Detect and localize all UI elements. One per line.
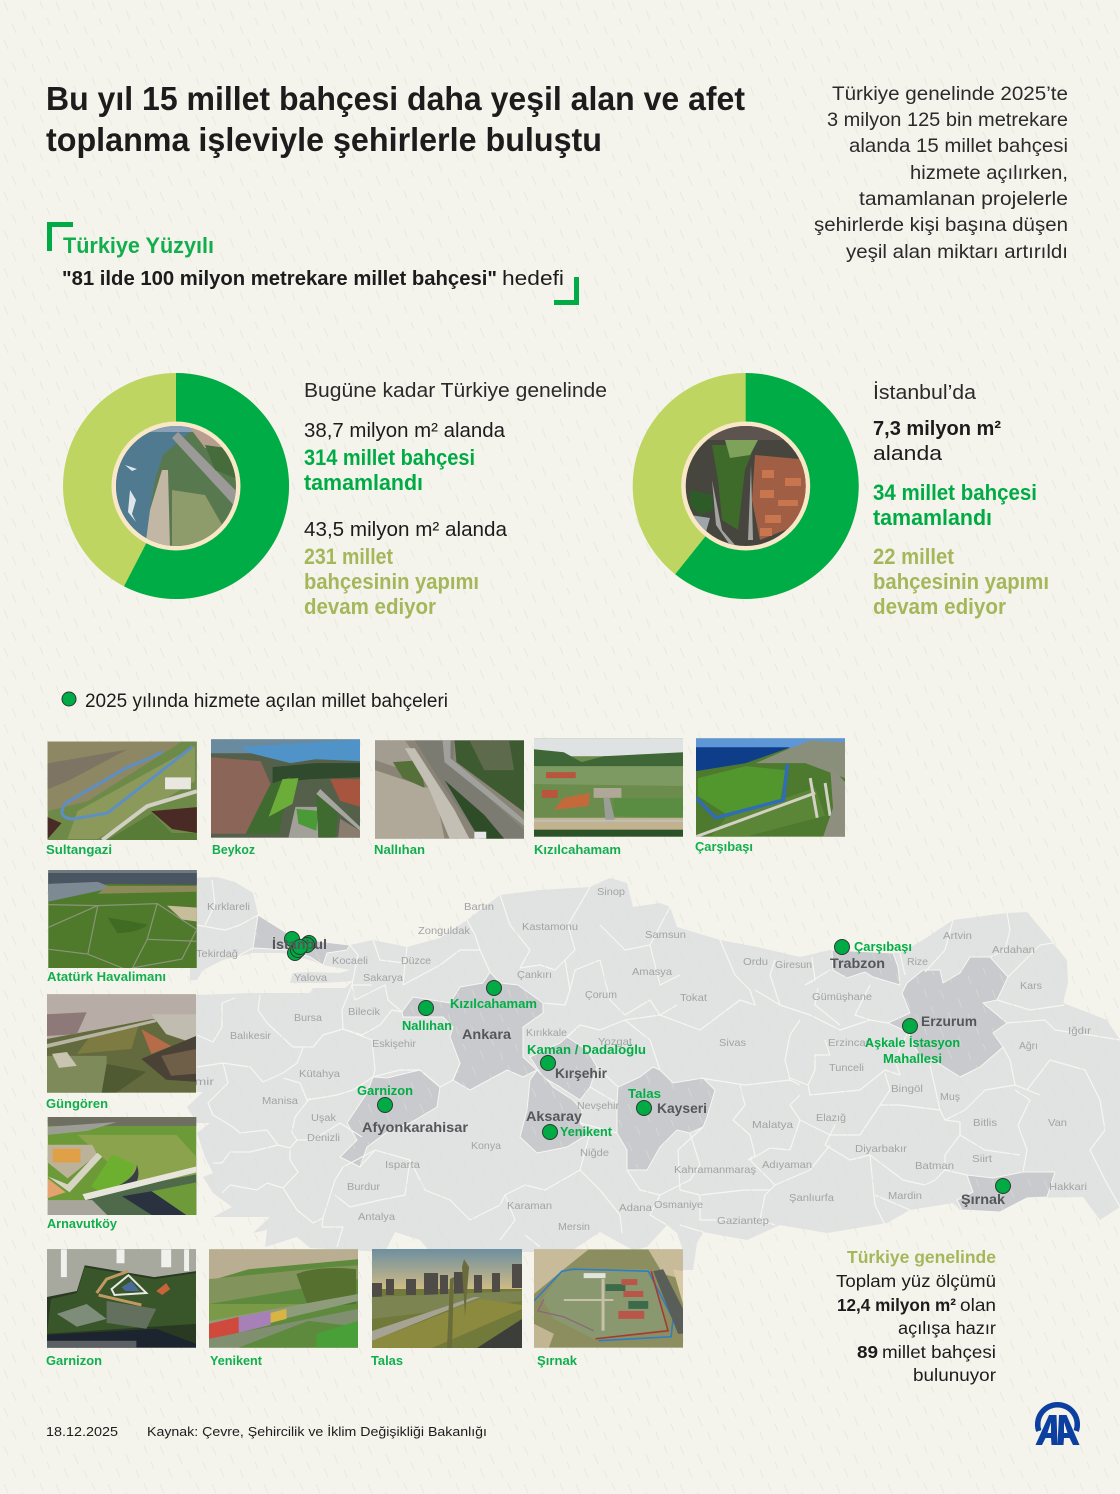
text: İstanbul stats: bahçesinin yapımı — [873, 569, 1049, 594]
photo captions: Atatürk Havalimanı — [47, 970, 166, 984]
text: Türkiye ready to open — [836, 1247, 996, 1385]
highlighted provinces — [253, 915, 1055, 1212]
map labels: provinces: Artvin — [943, 930, 972, 942]
map labels: provinces: Muş — [940, 1091, 960, 1103]
map labels: park locations: Garnizon — [357, 1084, 413, 1098]
icon: AA logo — [1036, 1405, 1080, 1445]
map labels: provinces: Denizli — [307, 1132, 340, 1144]
map labels: provinces: Adana — [619, 1202, 652, 1214]
map labels: provinces: Rize — [907, 956, 928, 968]
text: Türkiye ready to open: 12,4 milyon m² — [837, 1295, 956, 1315]
footer: 18.12.2025 — [46, 1424, 118, 1439]
map labels: provinces: Kahramanmaraş — [674, 1164, 756, 1176]
map labels: provinces: Bursa — [294, 1012, 322, 1024]
photo: Kızılcahamam — [534, 738, 683, 837]
map labels: provinces: Diyarbakır — [855, 1143, 908, 1155]
map labels: highlighted provinces: Kırşehir — [555, 1065, 608, 1081]
Sea of Marmara — [150, 953, 353, 995]
map labels: provinces: Tekirdağ — [196, 948, 238, 960]
callout: Türkiye Yüzyılı goal — [47, 222, 579, 305]
map labels: provinces: Kırıkkale — [526, 1027, 567, 1039]
map labels: highlighted provinces: Erzurum — [921, 1013, 977, 1029]
map labels: provinces: İzmir — [184, 1075, 215, 1088]
text: Türkiye stats: 314 millet bahçesi — [304, 445, 475, 470]
map labels: highlighted provinces: Aksaray — [526, 1108, 582, 1124]
map labels: provinces: Kars — [1020, 980, 1042, 992]
map labels: provinces: Kocaeli — [332, 955, 368, 967]
text: İstanbul stats: tamamlandı — [873, 505, 992, 530]
map labels: provinces: Adıyaman — [762, 1159, 812, 1171]
map labels: provinces: Kırklareli — [207, 901, 250, 913]
map labels: provinces: Uşak — [311, 1112, 337, 1124]
map labels: park locations: Talas — [628, 1087, 661, 1101]
photo captions: Nallıhan — [374, 843, 425, 857]
map labels: park locations: Kaman / Dadaloğlu — [527, 1043, 646, 1057]
photo: Arnavutköy — [48, 1117, 196, 1215]
map labels: provinces: Samsun — [645, 929, 686, 941]
intro text — [814, 83, 1068, 263]
text: Türkiye ready to open: olan — [960, 1295, 996, 1315]
photo captions: Arnavutköy — [47, 1217, 117, 1231]
map labels: provinces: Bitlis — [973, 1117, 997, 1129]
photo: Çarşıbaşı — [696, 738, 845, 837]
text: Türkiye stats — [304, 380, 607, 619]
photo captions: Yenikent — [210, 1354, 263, 1368]
map: Turkey provinces — [150, 877, 1120, 1270]
text: Türkiye stats: devam ediyor — [304, 594, 436, 619]
photo captions: Güngören — [46, 1097, 108, 1111]
map labels: provinces — [184, 886, 1092, 1233]
map labels: highlighted provinces: Şırnak — [961, 1191, 1005, 1207]
map labels: provinces: Antalya — [358, 1211, 395, 1223]
map labels: provinces: Çankırı — [517, 969, 552, 981]
map base — [187, 877, 1120, 1270]
title: toplanma işleviyle şehirlerle buluştu — [46, 121, 602, 158]
map labels: provinces: Manisa — [262, 1095, 298, 1107]
photo captions: Sultangazi — [46, 843, 112, 857]
map labels: provinces: Düzce — [401, 955, 431, 967]
text: Türkiye ready to open: 89 — [857, 1342, 878, 1362]
map labels: highlighted provinces — [272, 936, 1005, 1207]
text: İstanbul stats — [873, 381, 1049, 619]
map labels: provinces: Kastamonu — [522, 921, 578, 933]
map labels: provinces: Çorum — [585, 989, 617, 1001]
map labels: provinces: Bartın — [464, 901, 494, 913]
map labels: park locations: Kızılcahamam — [450, 997, 537, 1011]
donut photo: coast — [116, 426, 236, 546]
map labels: highlighted provinces: Kayseri — [657, 1100, 707, 1116]
text: Türkiye stats: 43,5 milyon m² alanda — [304, 519, 508, 541]
map labels: provinces: Bilecik — [348, 1006, 381, 1018]
map labels: park locations: Aşkale İstasyon — [865, 1035, 960, 1050]
text: İstanbul stats: alanda — [873, 442, 943, 465]
donut chart: İstanbul — [633, 373, 859, 599]
map labels: provinces: Nevşehir — [577, 1100, 620, 1112]
text: Türkiye ready to open: Türkiye genelinde — [847, 1247, 996, 1267]
map labels: park locations: Yenikent — [560, 1125, 613, 1139]
map labels: provinces: Elazığ — [816, 1112, 846, 1124]
photo: Beykoz — [211, 739, 360, 838]
text: Türkiye ready to open: açılışa hazır — [898, 1318, 996, 1338]
photo captions: Şırnak — [537, 1354, 577, 1368]
map labels: provinces: Balıkesir — [230, 1030, 272, 1042]
text: İstanbul stats: İstanbul’da — [873, 381, 977, 404]
map labels: provinces: Eskişehir — [372, 1038, 417, 1050]
footer: Kaynak: Çevre, Şehircilik ve İklim Değişikliği Bakanlığı — [147, 1424, 487, 1439]
text: Türkiye stats: 231 millet — [304, 544, 394, 569]
map labels: highlighted provinces: Ankara — [462, 1026, 511, 1042]
map labels: provinces: Niğde — [580, 1147, 609, 1159]
photo captions: Beykoz — [212, 843, 255, 857]
map labels: provinces: Zonguldak — [418, 925, 471, 937]
map labels: provinces: Gümüşhane — [812, 991, 872, 1003]
photo: Güngören — [47, 994, 196, 1093]
text: İstanbul stats: 34 millet bahçesi — [873, 480, 1037, 505]
map labels: provinces: Van — [1048, 1117, 1067, 1129]
map labels: provinces: Bingöl — [891, 1083, 923, 1095]
map labels: provinces: Batman — [915, 1160, 954, 1172]
donut chart: Türkiye — [63, 373, 289, 599]
map labels: provinces: Mersin — [558, 1221, 590, 1233]
map labels: provinces: Karaman — [507, 1200, 552, 1212]
map labels: provinces: Erzincan — [828, 1037, 872, 1049]
map markers — [284, 932, 1010, 1194]
photo: Sultangazi — [48, 742, 198, 840]
map labels: provinces: Ardahan — [992, 944, 1035, 956]
photo: Şırnak — [534, 1249, 683, 1348]
callout heading: Türkiye Yüzyılı — [63, 233, 214, 258]
text: Türkiye stats: tamamlandı — [304, 470, 423, 495]
map labels: park locations — [357, 940, 960, 1139]
intro text: 3 milyon 125 bin metrekare — [827, 109, 1068, 131]
title: Bu yıl 15 millet bahçesi daha yeşil alan ve afet — [46, 80, 745, 117]
text: Türkiye stats: Bugüne kadar Türkiye genelinde — [304, 380, 607, 402]
intro text: alanda 15 millet bahçesi — [849, 135, 1068, 157]
photo: Atatürk Havalimanı — [48, 870, 197, 968]
map labels: highlighted provinces: İstanbul — [272, 936, 327, 952]
map labels: provinces: Hakkari — [1049, 1181, 1087, 1193]
map labels: provinces: Sakarya — [363, 972, 403, 984]
photo captions: Garnizon — [46, 1354, 102, 1368]
intro text: tamamlanan projelerle — [859, 188, 1068, 210]
intro text: hizmete açılırken, — [910, 162, 1068, 184]
bracket bottom right — [554, 277, 579, 305]
map labels: park locations: Çarşıbaşı — [854, 940, 912, 954]
intro text: Türkiye genelinde 2025’te — [832, 83, 1068, 105]
map labels: provinces: Iğdır — [1068, 1025, 1092, 1037]
map labels: provinces: Siirt — [972, 1153, 992, 1165]
title — [46, 80, 745, 158]
map labels: provinces: Tokat — [680, 992, 707, 1004]
map labels: provinces: Amasya — [632, 966, 672, 978]
map labels: park locations: Mahallesi — [883, 1052, 942, 1066]
bracket top left — [47, 222, 73, 251]
map labels: provinces: Yozgat — [598, 1036, 632, 1048]
photo captions: Talas — [371, 1354, 403, 1368]
map labels: provinces: Yalova — [294, 972, 327, 984]
map labels: provinces: Ordu — [743, 956, 768, 968]
map labels: park locations: Nallıhan — [402, 1019, 452, 1033]
photo captions: Çarşıbaşı — [695, 840, 753, 854]
text: Türkiye ready to open: bulunuyor — [913, 1365, 996, 1385]
photo: Nallıhan — [375, 740, 524, 839]
donut photo: park in city — [686, 426, 806, 546]
map labels: provinces: Konya — [471, 1140, 501, 1152]
callout text: hedefi — [502, 268, 564, 290]
map labels: provinces: Şanlıurfa — [789, 1192, 834, 1204]
text: İstanbul stats: 22 millet — [873, 544, 955, 569]
photo: Yenikent — [209, 1249, 358, 1348]
map labels: provinces: Burdur — [347, 1181, 381, 1193]
photo: Garnizon — [47, 1249, 196, 1348]
map labels: provinces: Tunceli — [829, 1062, 864, 1074]
text: Türkiye stats: 38,7 milyon m² alanda — [304, 420, 506, 442]
photo: Talas — [372, 1249, 522, 1348]
text: İstanbul stats: devam ediyor — [873, 594, 1006, 619]
map labels: highlighted provinces: Afyonkarahisar — [362, 1119, 469, 1135]
map labels: highlighted provinces: Trabzon — [830, 955, 885, 971]
map labels: provinces: Kütahya — [299, 1068, 340, 1080]
map labels: provinces: Isparta — [385, 1159, 420, 1171]
map labels: provinces: Sinop — [597, 886, 625, 898]
map labels: provinces: Mardin — [888, 1190, 922, 1202]
map labels: provinces: Ağrı — [1019, 1040, 1038, 1052]
callout text: "81 ilde 100 milyon metrekare millet bahçesi" — [62, 268, 497, 290]
text: Türkiye ready to open: millet bahçesi — [882, 1342, 996, 1362]
province borders — [197, 880, 1120, 1247]
photo captions: Kızılcahamam — [534, 843, 621, 857]
text: Türkiye stats: bahçesinin yapımı — [304, 569, 479, 594]
intro text: şehirlerde kişi başına düşen — [814, 214, 1068, 236]
map labels: provinces: Osmaniye — [654, 1199, 703, 1211]
intro text: yeşil alan miktarı artırıldı — [846, 241, 1068, 263]
text: İstanbul stats: 7,3 milyon m² — [873, 417, 1001, 440]
legend: 2025 yılında hizmete açılan millet bahçeleri — [85, 691, 448, 712]
text: Türkiye ready to open: Toplam yüz ölçümü — [836, 1271, 996, 1291]
photo captions — [46, 840, 753, 1368]
map labels: provinces: Gaziantep — [717, 1215, 769, 1227]
map labels: provinces: Sivas — [719, 1037, 746, 1049]
map labels: provinces: Malatya — [752, 1119, 793, 1131]
map labels: provinces: Giresun — [775, 959, 812, 971]
